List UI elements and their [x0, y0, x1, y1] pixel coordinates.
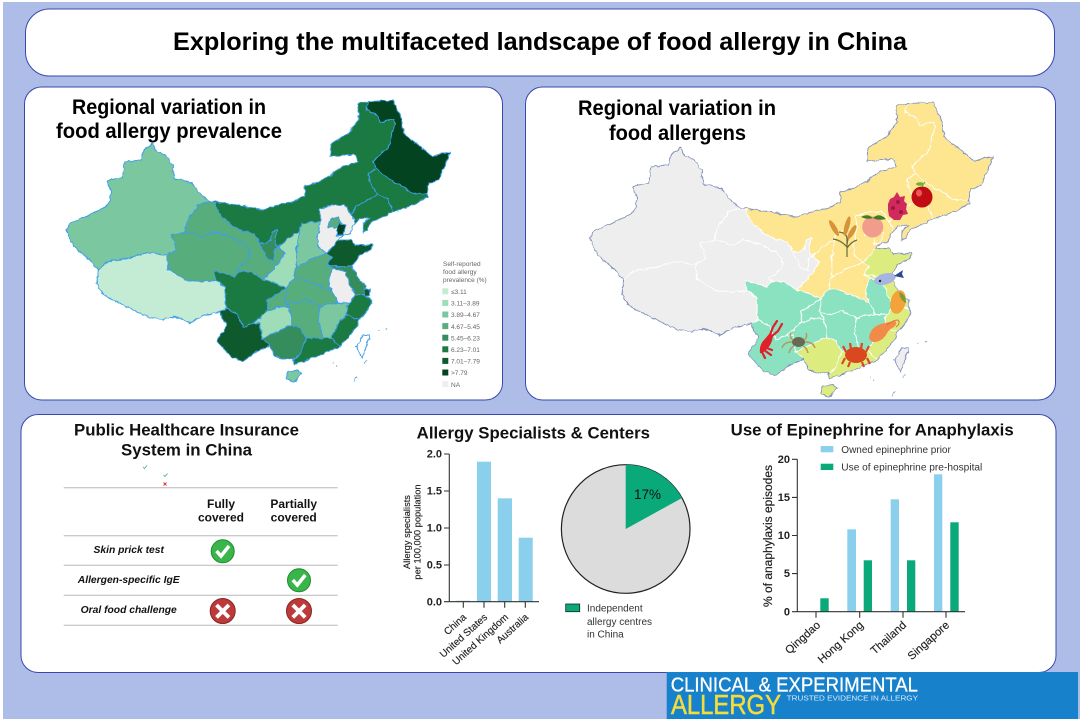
map legend — [442, 261, 487, 389]
heading: epinephrine: Use of Epinephrine for Anaphylaxis — [731, 422, 1014, 440]
icon: cross oral challenge partially covered — [286, 598, 312, 624]
heading: insurance: Public Healthcare Insurance — [74, 422, 299, 440]
insurance coverage table: covered — [271, 511, 317, 525]
insurance coverage table — [64, 488, 338, 625]
map legend: ≤3.11 — [451, 289, 467, 296]
bar chart: allergy specialists: Australia — [495, 612, 531, 646]
map legend: 7.01–7.79 — [451, 359, 480, 366]
insurance coverage table: Fully — [207, 497, 235, 511]
pie legend — [566, 604, 652, 641]
bar chart: epinephrine use: 0 — [784, 606, 790, 618]
pie chart: independent allergy centres — [561, 465, 690, 641]
choropleth map of China — [67, 100, 450, 382]
bar chart: allergy specialists: Allergy specialists — [402, 495, 412, 569]
icon: mango — [888, 288, 908, 316]
bar chart: epinephrine use: 10 — [778, 530, 790, 542]
heading: specialists: Allergy Specialists & Centers — [417, 424, 650, 442]
journal logo — [667, 672, 1078, 720]
bar chart: allergy specialists: 2.0 — [427, 448, 442, 460]
map legend: Self-reported — [443, 261, 481, 268]
map legend: >7.79 — [451, 370, 468, 377]
map legend: 5.45–6.23 — [451, 335, 480, 342]
panel: regional variation in food allergens — [526, 87, 1056, 400]
icon: check IgE partially covered — [288, 569, 310, 592]
insurance coverage table: Partially — [270, 497, 317, 511]
stray small marks — [143, 466, 168, 486]
journal logo: TRUSTED EVIDENCE IN ALLERGY — [787, 696, 918, 703]
icon: red crab — [842, 343, 870, 367]
map legend: 6.23–7.01 — [451, 347, 480, 354]
insurance coverage table: Skin prick test — [94, 545, 164, 556]
pie legend: Independent — [587, 604, 643, 614]
heading: insurance: System in China — [121, 442, 253, 460]
map legend: food allergy — [443, 269, 477, 276]
bar chart: epinephrine use: % of anaphylaxis episodes — [763, 465, 775, 607]
journal logo: CLINICAL & EXPERIMENTAL — [671, 674, 918, 696]
epinephrine legend — [821, 445, 982, 474]
bar chart: allergy specialists: United States — [438, 612, 490, 660]
insurance coverage table: Oral food challenge — [81, 605, 177, 616]
bar chart: allergy specialists: per 100,000 population — [412, 484, 422, 580]
heading: allergens map: Regional variation in — [578, 97, 776, 120]
insurance coverage table: covered — [198, 511, 244, 525]
icon: fish — [873, 270, 904, 287]
map legend: NA — [451, 382, 461, 389]
bar chart: epinephrine use: Qingdao — [783, 619, 823, 657]
bar chart: epinephrine use: Hong Kong — [816, 619, 866, 666]
heading: prevalence map: Regional variation in — [72, 96, 266, 119]
map legend: 3.11–3.89 — [451, 301, 480, 308]
icon: peach — [861, 215, 886, 238]
title panel: Exploring the multifaceted landscape of food allergy in China — [173, 28, 908, 56]
icon: cross oral challenge fully covered — [210, 598, 235, 624]
icon: brown crab — [782, 333, 815, 353]
icon: apple — [912, 182, 932, 208]
allergen region map of China — [590, 102, 993, 397]
bar chart: epinephrine use: 20 — [778, 454, 790, 466]
icon: dragon fruit — [888, 192, 908, 220]
epinephrine legend: Owned epinephrine prior — [841, 445, 951, 456]
pie legend: in China — [587, 630, 624, 641]
icon: check skin prick fully covered — [211, 540, 234, 563]
bar chart: epinephrine use: 15 — [778, 492, 790, 504]
map legend: 3.89–4.67 — [451, 312, 480, 319]
heading: prevalence map: food allergy prevalence — [56, 120, 282, 143]
bar chart: allergy specialists: United Kingdom — [451, 612, 511, 668]
title panel — [26, 9, 1054, 76]
pie chart: independent allergy centres: 17% — [634, 487, 661, 502]
bar chart: epinephrine use: Singapore — [906, 619, 952, 663]
bar chart: epinephrine use: 5 — [784, 568, 790, 580]
panel: bottom data panel — [21, 414, 1056, 672]
pie legend: allergy centres — [587, 617, 652, 628]
bar chart: allergy specialists: 0.5 — [427, 560, 442, 572]
heading: allergens map: food allergens — [609, 122, 746, 145]
icon: wheat — [827, 216, 858, 257]
bar chart: epinephrine use: Thailand — [869, 619, 909, 657]
icon: shrimp — [869, 320, 899, 342]
bar chart: allergy specialists: 1.5 — [427, 486, 442, 498]
bar chart: allergy specialists: 0.0 — [427, 596, 442, 608]
journal logo: ALLERGY — [671, 689, 781, 720]
map legend: 4.67–5.45 — [451, 324, 480, 331]
bar chart: allergy specialists: China — [442, 612, 469, 638]
map legend: prevalence (%) — [443, 277, 487, 284]
epinephrine legend: Use of epinephrine pre-hospital — [841, 463, 982, 474]
icon: crayfish — [760, 321, 782, 358]
bar chart: epinephrine use — [763, 445, 982, 666]
insurance coverage table: Allergen-specific IgE — [77, 575, 181, 586]
panel: regional variation in food allergy prevalence — [24, 87, 502, 400]
bar chart: allergy specialists: 1.0 — [427, 522, 442, 534]
bar chart: allergy specialists — [402, 448, 539, 668]
